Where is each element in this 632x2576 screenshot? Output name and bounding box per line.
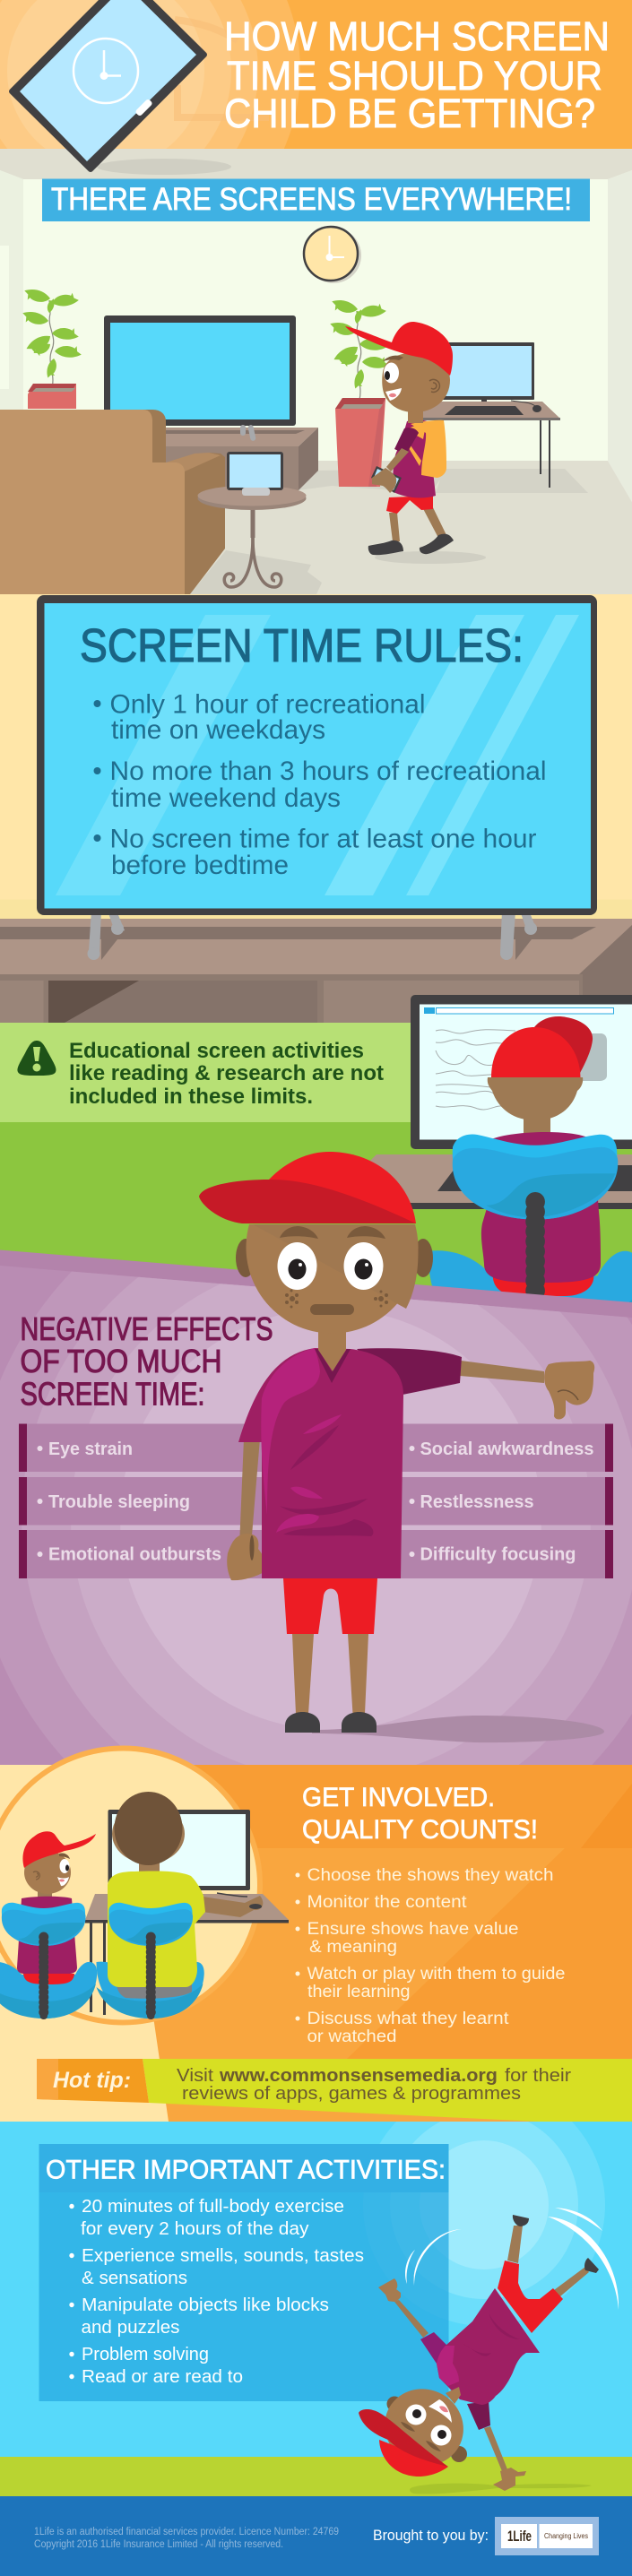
heading: get involved: GET INVOLVED. xyxy=(302,1783,495,1812)
logo: 1Life: Changing Lives xyxy=(544,2532,588,2540)
get involved list xyxy=(296,1866,565,2046)
panel: screen time rules tv xyxy=(37,595,597,915)
motion arcs xyxy=(405,2208,619,2310)
side table shadow xyxy=(190,550,322,594)
notice text xyxy=(69,1039,384,1109)
heading: negative effects xyxy=(20,1310,273,1413)
head xyxy=(359,2374,478,2480)
legs and shoes xyxy=(285,1634,377,1733)
wall clock xyxy=(304,227,361,283)
panel: get involved xyxy=(0,1748,632,2122)
ground xyxy=(0,2457,632,2496)
rules list: No screen time for at least one hour xyxy=(109,825,536,853)
heading: negative effects: OF TOO MUCH xyxy=(20,1343,222,1379)
get involved list: their learning xyxy=(307,1983,411,2001)
legal text: Copyright 2016 1Life Insurance Limited - All rights reserved. xyxy=(34,2539,283,2550)
freckles xyxy=(285,1289,388,1309)
hot tip text: www.commonsensemedia.org xyxy=(219,2066,498,2086)
legs xyxy=(507,2215,599,2296)
activities list: Experience smells, sounds, tastes xyxy=(82,2246,364,2266)
effects list: Social awkwardness xyxy=(420,1439,593,1459)
activities list: Read or are read to xyxy=(82,2367,243,2387)
title: TIME SHOULD YOUR xyxy=(227,53,602,99)
activities list: & sensations xyxy=(82,2269,187,2288)
arms xyxy=(378,2278,526,2491)
panel: other important activities xyxy=(0,2122,632,2457)
heading: other important activities: OTHER IMPORTANT ACTIVITIES: xyxy=(46,2155,446,2185)
rules list: Only 1 hour of recreational xyxy=(109,690,425,719)
tv stand legs xyxy=(88,911,537,960)
t-shirt xyxy=(437,2288,540,2405)
icon: warning xyxy=(17,1041,56,1076)
side table with tablet xyxy=(197,452,307,587)
head xyxy=(199,1152,433,1371)
get involved list: Discuss what they learnt xyxy=(307,2010,509,2028)
desk xyxy=(85,1810,289,2015)
panel: negative effects xyxy=(0,1249,632,1765)
logo: 1Life xyxy=(495,2517,599,2555)
effects list xyxy=(38,1439,593,1565)
effects list: Eye strain xyxy=(48,1439,133,1459)
get involved list: Monitor the content xyxy=(307,1893,467,1912)
adult xyxy=(97,1792,263,2019)
plant left xyxy=(21,287,82,409)
header banner xyxy=(0,0,632,149)
rules list: before bedtime xyxy=(111,851,289,880)
child at computer from behind xyxy=(327,995,632,1364)
heading: get involved: QUALITY COUNTS! xyxy=(302,1815,538,1845)
heading: get involved xyxy=(302,1783,538,1845)
hot tip banner xyxy=(37,2059,632,2122)
notice text: included in these limits. xyxy=(69,1085,313,1109)
brought to you by: Brought to you by: xyxy=(373,2527,489,2544)
get involved list: or watched xyxy=(307,2027,396,2046)
effects rows xyxy=(19,1423,613,1578)
cap and head xyxy=(488,1016,607,1134)
heading: negative effects: NEGATIVE EFFECTS xyxy=(20,1310,273,1347)
mouth xyxy=(310,1304,354,1315)
illustration circle xyxy=(0,1748,260,2022)
legal text: 1Life is an authorised financial services provider. Licence Number: 24769 xyxy=(34,2527,339,2537)
activities list: Manipulate objects like blocks xyxy=(82,2295,329,2315)
shadow xyxy=(312,1716,604,1742)
notice text: Educational screen activities xyxy=(69,1039,364,1063)
heading: negative effects: SCREEN TIME: xyxy=(20,1375,204,1413)
effects list: Difficulty focusing xyxy=(420,1545,576,1565)
hot tip text: reviews of apps, games & programmes xyxy=(182,2084,521,2104)
hot tip text xyxy=(177,2066,571,2104)
boy doing cartwheel xyxy=(359,2208,619,2491)
shorts xyxy=(283,1578,377,1634)
seat and jumper xyxy=(428,1132,632,1364)
title: HOW MUCH SCREEN xyxy=(224,13,610,59)
notice text: like reading & research are not xyxy=(69,1061,384,1085)
rules list: time weekend days xyxy=(111,783,341,813)
hot tip text: Visit xyxy=(177,2066,213,2086)
rules list: No more than 3 hours of recreational xyxy=(109,756,547,786)
hot tip label: Hot tip: xyxy=(53,2068,131,2093)
logo: 1Life: 1Life xyxy=(507,2528,532,2545)
illustration: adult and child at computer xyxy=(0,1792,289,2019)
title: CHILD BE GETTING? xyxy=(224,91,595,136)
tv cabinet xyxy=(143,425,318,490)
legal text xyxy=(34,2527,339,2550)
panel: green notice xyxy=(0,1023,632,1306)
room walls and floor xyxy=(0,149,632,594)
activities list: for every 2 hours of the day xyxy=(81,2219,308,2239)
footer xyxy=(0,2496,632,2576)
get involved list: Choose the shows they watch xyxy=(307,1866,554,1885)
cabinet xyxy=(0,919,632,1023)
living room scene xyxy=(0,149,632,594)
heading: screen time rules: SCREEN TIME RULES: xyxy=(80,620,524,672)
couch xyxy=(0,410,225,594)
large television xyxy=(104,316,296,426)
activities list: 20 minutes of full-body exercise xyxy=(82,2197,344,2217)
rules list: time on weekdays xyxy=(111,715,325,745)
banner: there are screens everywhere: THERE ARE SCREENS EVERYWHERE! xyxy=(51,182,572,217)
child xyxy=(0,1831,97,2019)
activities list xyxy=(69,2197,364,2387)
effects list: Restlessness xyxy=(420,1492,534,1512)
computer monitor xyxy=(327,995,632,1209)
arms xyxy=(227,1361,594,1580)
cap xyxy=(269,1152,416,1223)
get involved list: Watch or play with them to guide xyxy=(307,1965,565,1984)
get involved list: & meaning xyxy=(309,1938,397,1957)
activities list: and puzzles xyxy=(81,2318,179,2338)
tablet with clock icon xyxy=(12,0,231,175)
hot tip text: for their xyxy=(505,2066,571,2086)
desk and computer xyxy=(423,342,560,488)
title xyxy=(224,13,610,136)
effects list: Emotional outbursts xyxy=(48,1545,221,1565)
eyes xyxy=(278,1242,317,1290)
get involved list: Ensure shows have value xyxy=(307,1920,518,1939)
big boy thumbs down xyxy=(199,1152,604,1742)
plant in tall pot xyxy=(328,298,390,487)
boy walking xyxy=(345,322,486,564)
wall behind rules tv xyxy=(0,594,632,919)
phone xyxy=(371,466,402,493)
rules list xyxy=(93,690,547,880)
activities list: Problem solving xyxy=(82,2345,209,2364)
effects list: Trouble sleeping xyxy=(48,1492,190,1512)
t-shirt xyxy=(238,1348,462,1578)
shorts xyxy=(498,2260,563,2333)
